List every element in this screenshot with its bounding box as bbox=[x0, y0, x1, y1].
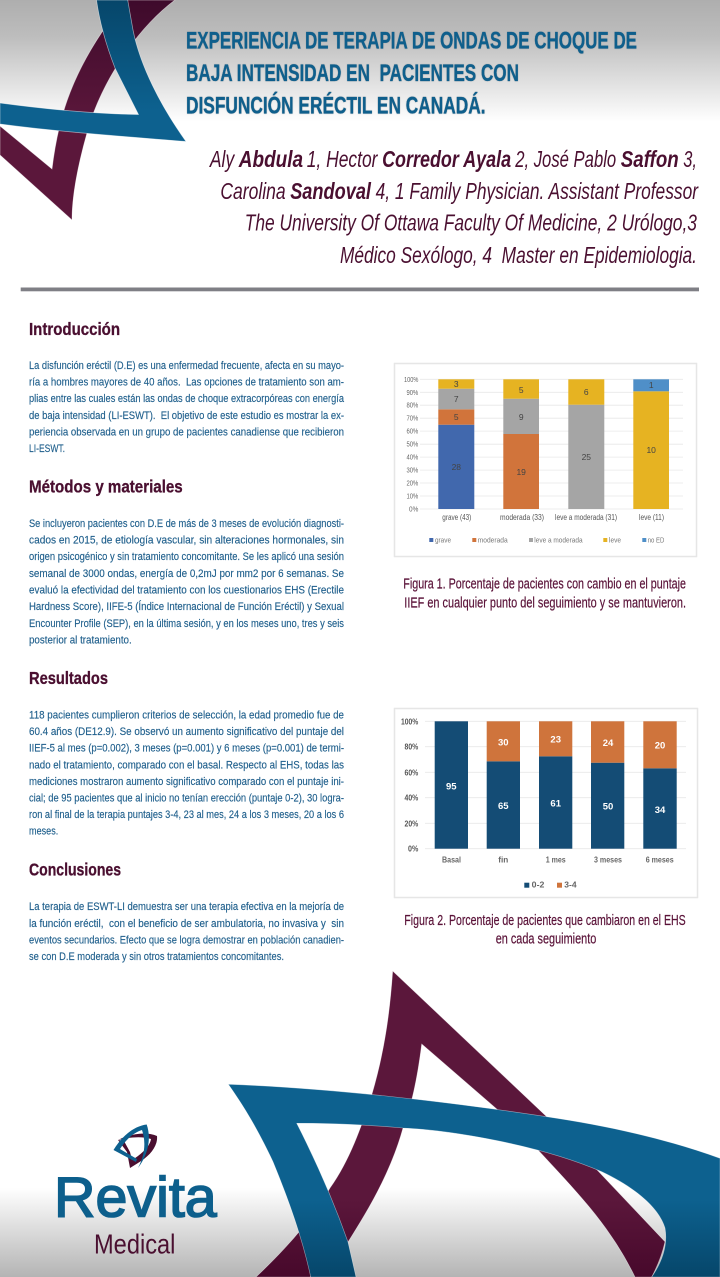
legend: leve a moderada bbox=[534, 536, 583, 545]
axis labels: 20% bbox=[406, 480, 418, 488]
star decoration: top left bbox=[0, 0, 186, 220]
bar: leve: 10 bbox=[646, 445, 656, 455]
bar: 6 meses bbox=[643, 721, 677, 849]
text block: introducción bbox=[29, 360, 345, 455]
axis labels: 60% bbox=[404, 767, 419, 777]
authors: Aly bbox=[208, 146, 235, 172]
bar: leve: 1 bbox=[649, 380, 654, 390]
text block: métodos: Hardness Score), IIFE-5 (Índice Internacional de Función Eréctil) y Sexual bbox=[29, 600, 344, 613]
heading: Métodos y materiales: Métodos y materiales bbox=[29, 476, 183, 496]
axis labels: 100% bbox=[401, 716, 419, 726]
section: Resultados bbox=[29, 668, 344, 838]
text block: resultados: ron al final de la terapia puntajes 3-4, 23 al mes, 24 a los 3 meses, 20 a los 6 bbox=[29, 809, 344, 821]
axis labels: 50% bbox=[406, 442, 418, 449]
bar: leve a moderada bbox=[568, 379, 604, 509]
text block: resultados bbox=[29, 710, 344, 838]
text block: resultados: meses. bbox=[29, 826, 58, 838]
text block: resultados: mediciones mostraron aumento significativo comparado con el puntaje ini- bbox=[29, 776, 344, 788]
text block: conclusiones: la función eréctil, con el beneficio de ser ambulatoria, no invasiva y sin bbox=[29, 918, 344, 930]
authors: Saffon bbox=[621, 146, 679, 172]
text block: métodos bbox=[29, 518, 344, 646]
category labels: 1 mes bbox=[546, 854, 566, 864]
legend: grave bbox=[435, 536, 451, 545]
logo word: Revita: Revita bbox=[54, 1166, 217, 1230]
text block: métodos: cados en 2015, de etiología vascular, sin alteraciones hormonales, sin bbox=[29, 534, 344, 546]
bar: fin: 30 bbox=[498, 738, 509, 748]
legend bbox=[429, 536, 665, 545]
legend bbox=[524, 880, 577, 890]
text block: conclusiones bbox=[29, 901, 344, 963]
text block: conclusiones: La terapia de ESWT-LI demuestra ser una terapia efectiva en la mejoría de bbox=[29, 901, 344, 913]
bar: fin: 65 bbox=[498, 801, 509, 812]
logo word: Medical: Medical bbox=[94, 1228, 175, 1259]
bar: grave bbox=[438, 379, 474, 509]
bar: 6 meses: 20 bbox=[655, 741, 665, 752]
text block: métodos: semanal de 3000 ondas, energía de 0,2mJ por mm2 por 6 semanas. Se bbox=[29, 568, 344, 580]
star decoration: bottom right bbox=[228, 971, 720, 1277]
caption: figura 2 bbox=[404, 912, 686, 948]
authors: 1, Hector bbox=[307, 146, 379, 172]
bar: 1 mes: 23 bbox=[550, 734, 561, 746]
authors: Corredor Ayala bbox=[382, 146, 511, 172]
bar: 3 meses bbox=[591, 721, 624, 849]
text block: métodos: origen psicogénico y sin tratamiento concomitante. Se les aplicó una sesión bbox=[29, 551, 344, 563]
authors: Sandoval bbox=[290, 178, 371, 204]
text block: introducción: La disfunción eréctil (D.E) es una enfermedad frecuente, afecta en su mayo- bbox=[29, 360, 344, 372]
axis labels: 40% bbox=[404, 793, 419, 803]
text block: conclusiones: se con D.E moderada y sin otros tratamientos concomitantes. bbox=[29, 951, 284, 963]
authors bbox=[208, 146, 699, 268]
category labels: grave (43) bbox=[442, 513, 472, 522]
legend: no ED bbox=[648, 536, 665, 545]
legend: 0-2 bbox=[532, 880, 545, 890]
text block: métodos: evaluó la efectividad del tratamiento con los cuestionarios EHS (Erectile bbox=[29, 584, 344, 596]
title: BAJA INTENSIDAD EN PACIENTES CON bbox=[186, 60, 519, 87]
text block: resultados: cial; de 95 pacientes que al inicio no tenían erección (puntaje 0-2), 30 logra- bbox=[29, 792, 344, 804]
caption: figura 1 bbox=[403, 575, 686, 611]
logo: Revita Medical bbox=[54, 1124, 217, 1259]
axis labels bbox=[404, 377, 418, 514]
authors: Abdula bbox=[238, 146, 303, 172]
text block: resultados: nado el tratamiento, comparado con el basal. Respecto al EHS, todas las bbox=[29, 759, 344, 771]
category labels: Basal bbox=[442, 854, 461, 864]
axis labels: 10% bbox=[406, 494, 418, 500]
title bbox=[186, 28, 637, 120]
axis labels bbox=[401, 716, 419, 854]
category labels: fin bbox=[498, 854, 508, 864]
bar: moderada: 19 bbox=[516, 467, 526, 477]
category labels: moderada (33) bbox=[500, 513, 544, 522]
text block: métodos: posterior al tratamiento. bbox=[29, 634, 132, 646]
category labels: 3 meses bbox=[594, 854, 622, 864]
bar: grave: 28 bbox=[452, 462, 461, 472]
category labels: 6 meses bbox=[646, 854, 674, 864]
axis labels: 20% bbox=[404, 818, 419, 828]
axis labels: 0% bbox=[409, 506, 418, 514]
axis labels: 100% bbox=[404, 377, 418, 384]
bar: 1 mes bbox=[539, 721, 572, 849]
heading: Conclusiones: Conclusiones bbox=[29, 860, 121, 880]
bar: moderada: 5 bbox=[519, 385, 524, 395]
text block: resultados: 118 pacientes cumplieron criterios de selección, la edad promedio fue de bbox=[29, 710, 344, 722]
text block: métodos: Encounter Profile (SEP), en la última sesión, y en los meses uno, tres y seis bbox=[29, 618, 344, 630]
authors: 3, bbox=[683, 146, 697, 172]
category labels bbox=[442, 513, 664, 522]
bar: leve a moderada: 25 bbox=[582, 452, 591, 462]
text block: resultados: 60.4 años (DE12.9). Se observó un aumento significativo del puntaje del bbox=[29, 726, 344, 738]
axis labels: 80% bbox=[404, 742, 419, 752]
axis labels: 40% bbox=[406, 455, 418, 462]
bar: leve bbox=[633, 379, 669, 509]
heading: Introducción: Introducción bbox=[29, 319, 120, 339]
legend: leve bbox=[609, 536, 621, 545]
section: Introducción bbox=[29, 319, 345, 455]
caption: figura 2: en cada seguimiento bbox=[496, 930, 596, 948]
text block: introducción: ría a hombres mayores de 40 años. Las opciones de tratamiento son am- bbox=[29, 376, 344, 388]
axis labels: 60% bbox=[406, 429, 418, 436]
bar: Basal bbox=[435, 721, 468, 849]
bar: moderada bbox=[503, 379, 539, 509]
text block: conclusiones: eventos secundarios. Efecto que se logra demostrar en población canadien- bbox=[29, 934, 344, 946]
bar: grave: 7 bbox=[454, 394, 459, 404]
category labels bbox=[442, 854, 674, 864]
bar: 3 meses: 50 bbox=[603, 802, 613, 812]
text block: introducción: LI-ESWT. bbox=[29, 443, 65, 455]
heading: Resultados: Resultados bbox=[29, 668, 108, 688]
axis labels: 70% bbox=[406, 416, 418, 423]
axis labels: 90% bbox=[406, 390, 418, 397]
bar: Basal: 95 bbox=[446, 782, 457, 792]
bar: grave: 5 bbox=[454, 412, 459, 422]
bar chart: figura 1 bbox=[394, 364, 696, 556]
text block: introducción: de baja intensidad (LI-ESWT). El objetivo de este estudio es mostrar la ex- bbox=[29, 410, 344, 422]
bar: grave: 3 bbox=[454, 379, 459, 389]
bar: fin bbox=[487, 721, 520, 849]
bar: 1 mes: 61 bbox=[550, 798, 562, 810]
section: Métodos y materiales bbox=[29, 476, 344, 646]
bar: moderada: 9 bbox=[519, 412, 524, 422]
authors: Carolina bbox=[220, 178, 286, 204]
category labels: leve (11) bbox=[639, 513, 664, 522]
legend: moderada bbox=[478, 536, 508, 545]
bar: 3 meses: 24 bbox=[603, 738, 614, 749]
text block: introducción: periencia observada en un grupo de pacientes canadiense que recibieron bbox=[29, 426, 344, 438]
bar chart: figura 2 bbox=[394, 708, 698, 898]
bar: 6 meses: 34 bbox=[655, 805, 666, 816]
axis labels: 80% bbox=[406, 403, 418, 410]
authors: 2, José Pablo bbox=[514, 146, 616, 172]
text block: métodos: Se incluyeron pacientes con D.E de más de 3 meses de evolución diagnosti- bbox=[29, 518, 344, 530]
text block: resultados: IIEF-5 al mes (p=0.002), 3 meses (p=0.001) y 6 meses (p=0.001) de termi- bbox=[29, 743, 344, 755]
section: Conclusiones bbox=[29, 860, 344, 963]
category labels: leve a moderada (31) bbox=[555, 513, 617, 522]
legend: 3-4 bbox=[564, 880, 577, 890]
axis labels: 0% bbox=[408, 844, 419, 854]
icon: star logo bbox=[114, 1124, 157, 1168]
axis labels: 30% bbox=[406, 468, 418, 475]
bar: leve a moderada: 6 bbox=[584, 387, 589, 397]
title: DISFUNCIÓN ERÉCTIL EN CANADÁ. bbox=[186, 92, 486, 120]
text block: introducción: plias entre las cuales están las ondas de choque extracorpóreas con energía bbox=[29, 393, 345, 405]
